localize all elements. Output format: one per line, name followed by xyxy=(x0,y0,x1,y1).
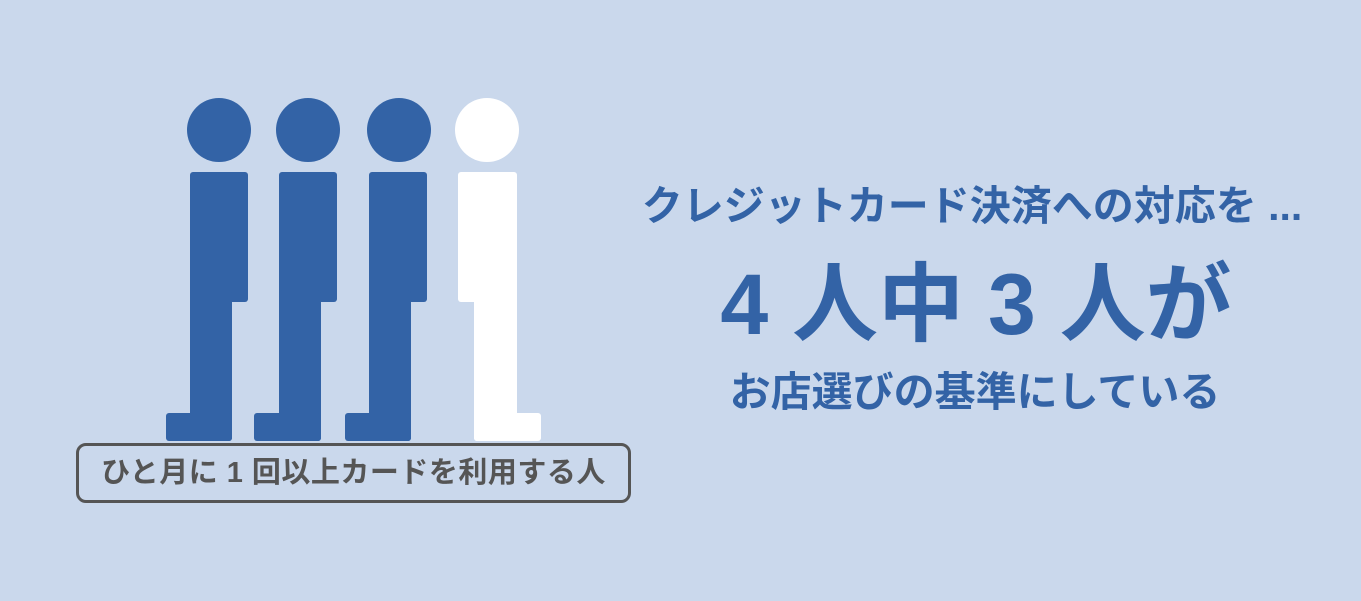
figure 1 xyxy=(166,98,251,441)
figure 2 xyxy=(254,98,340,441)
label box xyxy=(76,443,631,503)
label box: ひと月に 1 回以上カードを利用する人 xyxy=(101,457,606,489)
people pictogram xyxy=(166,98,541,441)
heading line 3: お店選びの基準にしている xyxy=(730,369,1220,415)
heading line 1: クレジットカード決済への対応を ... xyxy=(642,183,1302,229)
figure 4 (white) xyxy=(455,98,541,441)
figure 3 xyxy=(345,98,431,441)
main stat: 4 人中 3 人が xyxy=(720,257,1232,353)
